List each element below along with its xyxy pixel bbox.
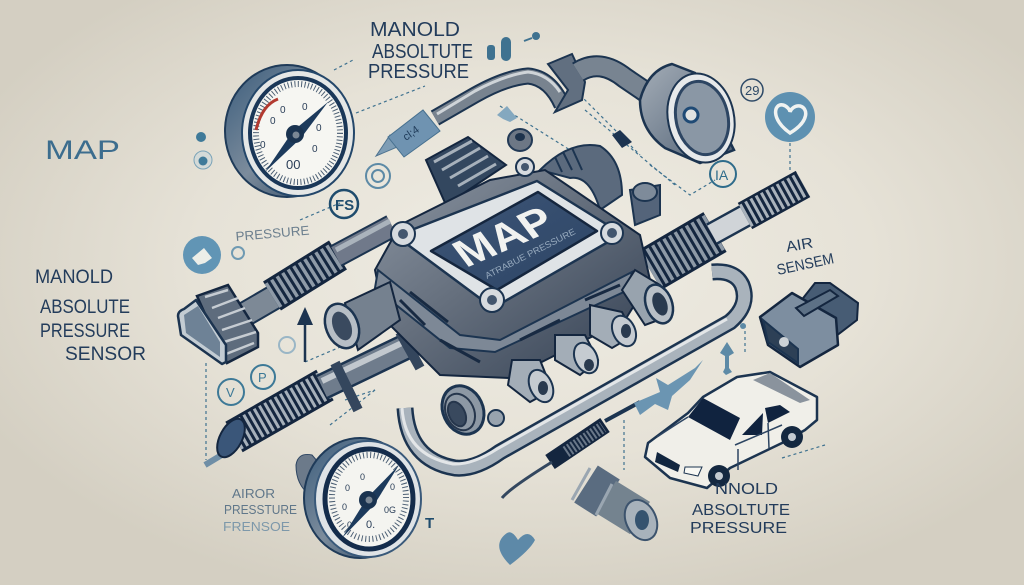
icon: house arrow	[497, 106, 517, 122]
icon: small circled letters left	[218, 337, 295, 405]
gauge numbers: 0	[390, 482, 395, 492]
connector tabs	[800, 283, 858, 336]
gauge numbers: 0	[312, 144, 318, 155]
smooth section	[336, 226, 392, 256]
gauge ticks	[256, 84, 340, 182]
main casting	[375, 170, 650, 378]
connector opening	[178, 300, 226, 364]
gauge bezel	[325, 449, 413, 549]
text block: Manifold absolute pressure sensor: PRESSURE	[40, 321, 130, 342]
icon: small circle near pressure	[232, 247, 244, 259]
text block: bottom right label	[690, 481, 790, 537]
sensor box	[388, 110, 440, 157]
icon: teal pin left of gauge	[194, 132, 212, 169]
side fitting	[630, 185, 660, 225]
label: air sensor	[775, 234, 836, 279]
icon: small circled letters left: P	[258, 370, 267, 385]
text block: bottom right label: PRESSURE	[690, 520, 787, 537]
icon: circled IA: IA	[715, 167, 729, 183]
gauge ticks	[332, 455, 406, 539]
plate panel	[431, 192, 597, 290]
icon: droplet badge	[183, 236, 221, 274]
number 29: 29	[745, 83, 759, 98]
plate bolts	[391, 158, 623, 312]
label: air pressure sensor bottom: AIROR	[232, 486, 275, 501]
gauge numbers: 0	[270, 116, 276, 127]
sensor tip	[376, 135, 402, 156]
gauge numbers	[260, 102, 322, 155]
top pipe with sensor head	[376, 54, 743, 169]
manifold body	[375, 137, 660, 378]
MAP plate	[391, 158, 623, 312]
icon: hearts bottom	[499, 532, 535, 565]
icon: letter T bottom: T	[425, 515, 434, 532]
gauge housing	[225, 65, 349, 197]
wheels	[708, 465, 730, 487]
pipe collar on elbow	[548, 54, 585, 112]
gauge numbers: 0	[345, 483, 350, 493]
plate title: MAP	[444, 199, 564, 276]
tube: right	[650, 184, 803, 270]
connector collar	[197, 285, 258, 363]
plate frame	[396, 181, 622, 308]
collars	[335, 332, 420, 410]
text block: bottom right label: NNOLD	[715, 481, 778, 498]
label: air pressure sensor bottom: PRESSTURE	[224, 502, 297, 517]
corrugated outer	[745, 184, 803, 216]
corrugated section	[234, 385, 325, 437]
end cap	[211, 414, 251, 462]
icon: small circled letters left: V	[226, 385, 235, 400]
port: left big	[319, 282, 400, 353]
icon: small pointer above dart	[720, 323, 746, 375]
gauge readout: 00	[286, 157, 300, 172]
cup body	[640, 64, 734, 163]
first pipe	[435, 76, 562, 118]
text block: top label	[368, 19, 473, 83]
gauge hub	[359, 491, 377, 509]
icon: circled FS	[330, 190, 358, 218]
lower flange	[375, 270, 632, 352]
icon: small top marks	[487, 32, 540, 61]
dashed leader lines	[206, 59, 825, 470]
gauge readout: 0.	[366, 519, 375, 531]
icon: up arrow	[297, 307, 313, 362]
finned cover	[426, 137, 506, 205]
windshield	[688, 398, 740, 440]
casting details	[400, 285, 620, 362]
loop pipe	[402, 272, 744, 468]
gauge red zone	[256, 99, 278, 130]
smooth link	[712, 212, 752, 234]
coil fitting	[434, 379, 504, 441]
text block: top label: ABSOLTUTE	[372, 41, 473, 63]
label: air pressure sensor bottom	[223, 486, 297, 534]
car	[645, 372, 817, 488]
truck bed	[753, 373, 810, 403]
gauge numbers	[342, 472, 396, 530]
probe tip	[205, 447, 235, 465]
plate subtitle: ATRABUE PRESSURE	[483, 226, 577, 281]
port: lower 3	[508, 360, 558, 406]
smooth grip	[235, 288, 290, 320]
label: air sensor: SENSEM	[775, 250, 836, 279]
heading: MAP left: MAP	[45, 135, 120, 165]
side windows	[742, 413, 763, 435]
corrugated section	[272, 255, 338, 296]
gauge: top left	[225, 65, 354, 197]
connector opening	[763, 320, 798, 363]
icon: washer	[508, 129, 532, 151]
icon: dart connector	[502, 360, 703, 498]
text block: Manifold absolute pressure sensor: ABSOLUTE	[40, 297, 130, 318]
text block: top label: MANOLD	[370, 19, 460, 41]
gauge: bottom	[296, 438, 421, 558]
label: pressure faded: PRESSURE	[235, 223, 310, 244]
cup eye	[684, 108, 698, 122]
corrugated inner	[650, 232, 715, 270]
gauge numbers: 0	[360, 472, 365, 482]
icon: spiral	[366, 164, 390, 188]
cup ring	[659, 67, 743, 169]
port: right	[622, 270, 678, 327]
gauge numbers: 0	[316, 123, 322, 134]
gauge numbers: 0	[347, 520, 352, 530]
car lines	[657, 417, 782, 470]
gauge needle	[265, 102, 328, 172]
smooth section	[322, 335, 430, 387]
gauge hub	[286, 125, 304, 143]
icon: heart badge	[765, 92, 815, 142]
connector clip	[796, 290, 838, 316]
gauge needle	[342, 465, 399, 538]
icon: circled FS: FS	[335, 197, 354, 214]
text block: top label: PRESSURE	[368, 61, 469, 83]
connector body	[760, 293, 838, 367]
number 29	[741, 79, 763, 101]
gauge housing	[304, 438, 416, 558]
text block: Manifold absolute pressure sensor: MANOLD	[35, 267, 113, 288]
gauge rim	[242, 70, 354, 196]
icon: arrow marker top right	[612, 130, 632, 148]
text block: Manifold absolute pressure sensor: SENSOR	[65, 344, 146, 365]
connector: right	[760, 283, 858, 367]
gauge rim	[315, 441, 421, 557]
headlight	[684, 467, 702, 476]
label: air sensor: AIR	[785, 234, 814, 256]
cup inner	[669, 76, 735, 160]
cylinder bottom	[572, 468, 663, 545]
text block: bottom right label: ABSOLTUTE	[692, 502, 790, 519]
grille	[655, 452, 680, 472]
gauge numbers: 0	[302, 102, 308, 113]
icon: circled IA	[710, 161, 736, 187]
port: lower 2	[555, 335, 603, 377]
tube: upper left with connector	[178, 221, 392, 364]
gauge stem	[296, 454, 325, 495]
tube: lower left with probe	[205, 332, 430, 465]
sensor box label: cl;4	[401, 124, 422, 143]
car body	[645, 372, 817, 488]
label: air pressure sensor bottom: FRENSOE	[223, 519, 290, 534]
gauge bezel	[250, 78, 346, 188]
gauge numbers: 0	[280, 105, 286, 116]
gauge numbers: 0G	[384, 505, 396, 515]
gauge numbers: 0	[342, 502, 347, 512]
second pipe	[578, 66, 650, 95]
rear duct	[540, 145, 622, 210]
port: lower 1	[590, 305, 641, 350]
gauge numbers: 0	[260, 140, 266, 151]
text block: Manifold absolute pressure sensor	[35, 267, 146, 365]
